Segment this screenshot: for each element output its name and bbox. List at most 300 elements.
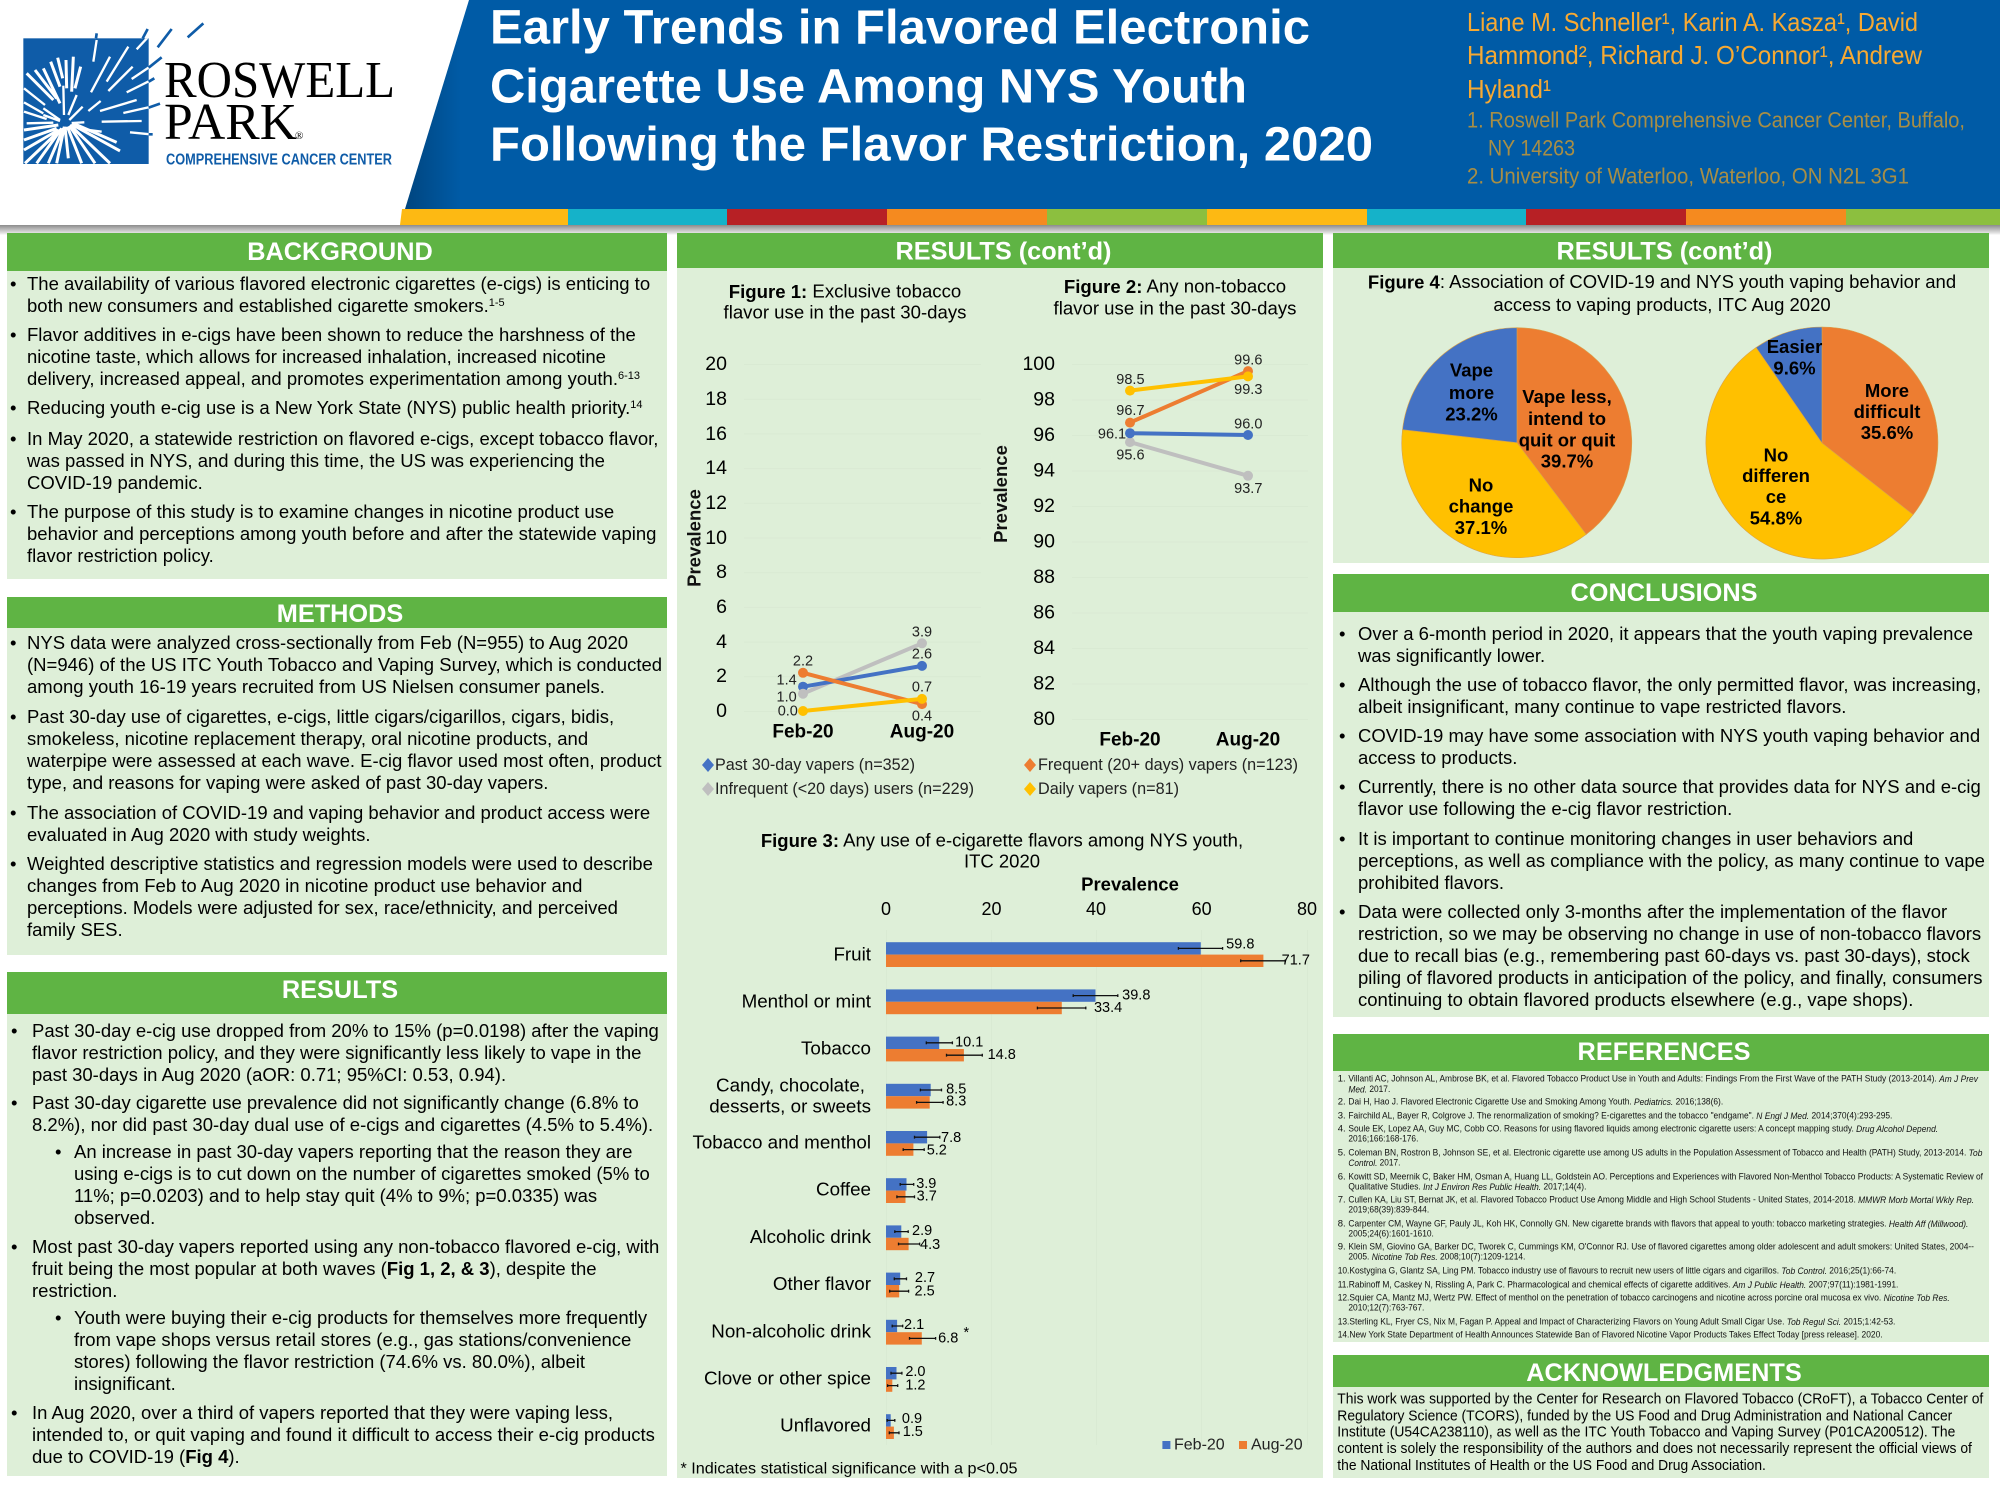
chart: figure 3 bar chart: 0 xyxy=(881,899,891,919)
bar row: Tobacco and menthol: Tobacco and menthol xyxy=(692,1132,871,1152)
bullet list: background: • xyxy=(10,428,16,449)
chart: figure 1 line chart: 0.7 xyxy=(912,680,932,696)
bar row: Clove or other spice: 2.0 xyxy=(905,1364,925,1380)
bullet list: results: restriction. xyxy=(32,1280,117,1301)
bullet list: conclusions: access to products. xyxy=(1358,747,1517,768)
bar row: Tobacco and menthol: 7.8 xyxy=(941,1130,961,1146)
chart: figure 3 bar chart: 80 xyxy=(1297,899,1317,919)
bullet list: background: The availability of various flavored electronic cigarettes (e-cigs) is enticing to xyxy=(27,273,650,294)
chart: figure 3 bar chart: 20 xyxy=(981,899,1002,919)
bar row: Tobacco: Tobacco xyxy=(801,1038,871,1058)
bullet list: background: COVID-19 pandemic. xyxy=(27,472,203,493)
bar row: Candy, chocolate, desserts, or sweets: Candy, chocolate, xyxy=(716,1074,865,1096)
bullet list: methods: Weighted descriptive statistics and regression models were used to describe xyxy=(27,852,653,874)
panel: results xyxy=(7,972,667,1476)
bullet list: conclusions: flavor use following the e-cig flavor restriction. xyxy=(1358,798,1732,819)
reference list: Cullen KA, Liu ST, Bernat JK, et al. Flavored Tobacco Product Use Among Middle and High School Students - United States, 2014-2018. MMWR Morb Mortal Wkly Rep. xyxy=(1348,1194,1974,1206)
bullet list: background: • xyxy=(10,500,16,522)
bar row: Clove or other spice: 1.2 xyxy=(905,1378,925,1394)
bar row: Fruit: 71.7 xyxy=(1282,952,1310,968)
heading: acknowledgments: ACKNOWLEDGMENTS xyxy=(1526,1359,1802,1387)
reference list: 11.Rabinoff M, Caskey N, Rissling A, Park C. Pharmacological and chemical effects of cigarette additives. Am J Public Health. 2007;97(11):1981-1991. xyxy=(1338,1280,1898,1290)
chart: figure 1 line chart: 2.6 xyxy=(912,646,932,662)
bullet list: background: nicotine taste, which allows for increased inhalation, increased nicotine xyxy=(27,346,606,367)
bullet list: results: using e-cigs is to cut down on the number of cigarettes smoked (5% to xyxy=(74,1163,650,1184)
bullet list: background: both new consumers and established cigarette smokers.1-5 xyxy=(27,295,505,316)
chart: figure 2 line chart: 96.7 xyxy=(1116,403,1145,419)
bullet list: methods: smokeless, nicotine replacement therapy, oral nicotine products, and xyxy=(27,728,588,749)
chart: figure 2 line chart: 88 xyxy=(1033,566,1055,588)
figure 3 title: ITC 2020 xyxy=(964,850,1040,872)
bar row: Unflavored: 0.9 xyxy=(902,1411,922,1427)
reference list: Control. 2017. xyxy=(1348,1158,1400,1168)
authors: Hammond², Richard J. O’Connor¹, Andrew xyxy=(1467,40,1922,70)
bar row: Coffee: 3.9 xyxy=(916,1176,936,1192)
bar row: Other flavor: 2.5 xyxy=(915,1283,935,1299)
panel: results continued, figures 1-3 xyxy=(677,233,1323,1478)
reference list: 2010;12(7):763-767. xyxy=(1348,1302,1424,1314)
chart: figure 2 line chart: Prevalence xyxy=(990,445,1011,543)
header banner xyxy=(0,0,2000,225)
bullet list: methods: • xyxy=(10,852,16,874)
bullet list: background: Reducing youth e-cig use is a New York State (NYS) public health priority.14 xyxy=(27,397,643,418)
chart: pie, access to products: More xyxy=(1865,380,1909,401)
reference list: 7. xyxy=(1338,1194,1346,1206)
chart: figure 2 line chart: 99.6 xyxy=(1234,352,1262,368)
chart: figure 1 line chart: 6 xyxy=(716,596,727,618)
title: Following the Flavor Restriction, 2020 xyxy=(490,118,1373,172)
bullet list: conclusions: It is important to continue monitoring changes in user behaviors and xyxy=(1358,828,1913,849)
bullet list: conclusions: perceptions, as well as compliance with the policy, as many continue to vape xyxy=(1358,850,1985,871)
bar row: Other flavor: Other flavor xyxy=(773,1273,871,1294)
chart: pie, change in vaping behavior: No xyxy=(1469,474,1493,496)
chart: pie, access to products: 35.6% xyxy=(1861,422,1913,443)
chart: figure 1 line chart: 0 xyxy=(716,700,727,722)
bar row: Candy, chocolate, desserts, or sweets: 8.3 xyxy=(946,1094,966,1110)
heading: results cont'd: RESULTS (cont’d) xyxy=(1557,238,1772,266)
bar row: Tobacco xyxy=(801,1035,1016,1063)
legend: line charts: Daily vapers (n=81) xyxy=(1038,780,1179,798)
legend: line charts: Past 30-day vapers (n=352) xyxy=(715,756,915,774)
chart: figure 1 line chart: Aug-20 xyxy=(890,722,954,742)
reference list: 2. xyxy=(1338,1096,1346,1108)
chart: pie, change in vaping behavior: quit or quit xyxy=(1519,430,1615,450)
bullet list: background: behavior and perceptions among youth before and after the statewide vaping xyxy=(27,522,656,544)
legend: line charts: Frequent (20+ days) vapers (n=123) xyxy=(1038,756,1298,774)
acknowledgments text: the National Institutes of Health or the US Food and Drug Association. xyxy=(1337,1458,1766,1474)
chart: figure 2 line chart xyxy=(990,352,1308,750)
bullet list: methods: • xyxy=(10,706,16,727)
reference list: Carpenter CM, Wayne GF, Pauly JL, Koh HK, Connolly GN. New cigarette brands with flavors that appeal to youth: tobacco marketing strategies. Health Aff (Millwood). xyxy=(1348,1218,1968,1230)
chart: figure 1 line chart: 18 xyxy=(705,388,727,410)
chart: pie, change in vaping behavior: 23.2% xyxy=(1445,404,1498,424)
chart: figure 2 line chart: 98 xyxy=(1033,388,1055,410)
reference list: 9. xyxy=(1338,1242,1346,1252)
reference list: Med. 2017. xyxy=(1348,1084,1390,1095)
bullet list: results: • xyxy=(11,1092,17,1113)
figure 4 title: access to vaping products, ITC Aug 2020 xyxy=(1493,294,1831,315)
legend: line charts xyxy=(702,756,1298,798)
bullet list: conclusions: • xyxy=(1339,725,1345,746)
chart: figure 1 line chart: 10 xyxy=(705,527,727,549)
title: Cigarette Use Among NYS Youth xyxy=(490,60,1247,114)
chart: pie, change in vaping behavior: Vape less, xyxy=(1522,386,1612,407)
bullet list: methods xyxy=(10,632,662,940)
reference list: Qualitative Studies. Int J Environ Res Public Health. 2017;14(4). xyxy=(1348,1182,1586,1192)
bar row: Unflavored xyxy=(780,1411,923,1440)
chart: figure 1 line chart: 0.4 xyxy=(912,708,932,724)
blue title band xyxy=(405,0,2000,209)
chart: pie, access to products: ce xyxy=(1766,486,1786,507)
bullet list: conclusions: • xyxy=(1339,828,1345,849)
bullet list: results: fruit being the most popular at both waves (Fig 1, 2, & 3), despite the xyxy=(32,1258,597,1279)
heading: results cont'd xyxy=(1333,233,1989,268)
bullet list: conclusions: Over a 6-month period in 2020, it appears that the youth vaping prevalence xyxy=(1358,623,1973,644)
chart: pie, access to products: differen xyxy=(1742,465,1810,486)
legend: line charts: Infrequent (<20 days) users (n=229) xyxy=(715,780,974,798)
figure 4 title xyxy=(1368,271,1956,315)
acknowledgments text xyxy=(1337,1391,1984,1474)
bar row: Alcoholic drink xyxy=(750,1223,940,1253)
bullet list: background: The purpose of this study is to examine changes in nicotine product use xyxy=(27,500,614,522)
bar row: Coffee: 3.7 xyxy=(917,1188,937,1204)
chart: pie, change in vaping behavior: Vape xyxy=(1450,360,1493,380)
authors xyxy=(1467,7,1922,104)
chart: pie, access to products: 54.8% xyxy=(1750,508,1802,528)
bar row: Tobacco and menthol xyxy=(692,1130,961,1158)
bar row: Tobacco: 14.8 xyxy=(988,1047,1016,1063)
bar row: Clove or other spice: Clove or other spice xyxy=(704,1368,871,1388)
bar row: Coffee xyxy=(816,1176,937,1204)
bar row: Candy, chocolate, desserts, or sweets: desserts, or sweets xyxy=(709,1096,871,1116)
bullet list: results: 8.2%), nor did past 30-day dual use of e-cigs and cigarettes (4.5% to 5.4%). xyxy=(32,1114,653,1135)
bar row: Non-alcoholic drink: 2.1 xyxy=(904,1317,924,1333)
panel: references xyxy=(1333,1034,1989,1342)
chart: figure 1 line chart: 4 xyxy=(716,631,727,653)
icon: Roswell Park starburst logo mark xyxy=(23,23,203,164)
chart: figure 1 line chart: 16 xyxy=(705,423,727,445)
chart: figure 1 line chart: 2 xyxy=(716,665,727,687)
affiliations: 2. University of Waterloo, Waterloo, ON N2L 3G1 xyxy=(1467,164,1909,188)
bar row: Clove or other spice xyxy=(704,1364,925,1394)
bullet list: conclusions: restriction, so we may be observing no change in use of non-tobacco flavors xyxy=(1358,923,1981,944)
bullet list: results: • xyxy=(55,1307,61,1328)
chart: figure 2 line chart: Feb-20 xyxy=(1099,730,1161,750)
chart: pie, change in vaping behavior: 37.1% xyxy=(1455,517,1507,538)
chart: figure 3 bar chart: 60 xyxy=(1192,899,1212,919)
chart: figure 2 line chart: Aug-20 xyxy=(1216,730,1280,750)
bullet list: background: was passed in NYS, and during this time, the US was experiencing the xyxy=(27,450,605,471)
bar row: Menthol or mint: Menthol or mint xyxy=(742,990,872,1012)
bullet list: conclusions: continuing to obtain flavored products elsewhere (e.g., vape shops). xyxy=(1358,989,1913,1010)
chart: figure 2 line chart: 96 xyxy=(1033,424,1055,446)
chart: pie, access to products: difficult xyxy=(1854,401,1920,422)
figure 3 title: Figure 3: Any use of e-cigarette flavors among NYS youth, xyxy=(761,830,1243,850)
title xyxy=(490,2,1373,172)
chart: figure 1 line chart xyxy=(684,353,981,742)
bullet list: results: Youth were buying their e-cig products for themselves more frequently xyxy=(74,1307,647,1328)
bullet list: results: • xyxy=(11,1020,17,1041)
reference list xyxy=(1338,1074,1983,1340)
bar row: Alcoholic drink: 2.9 xyxy=(912,1223,932,1239)
chart: pie, change in vaping behavior: 39.7% xyxy=(1541,450,1593,472)
panel: background xyxy=(7,233,667,579)
bullet list: methods: • xyxy=(10,802,16,822)
affiliations: NY 14263 xyxy=(1488,136,1575,160)
figure 2 title xyxy=(1054,276,1296,318)
title: Early Trends in Flavored Electronic xyxy=(490,2,1310,54)
chart: figure 1 line chart: Prevalence xyxy=(684,489,704,587)
heading: results: RESULTS xyxy=(282,976,398,1004)
reference list: 4. xyxy=(1338,1124,1346,1134)
panel: acknowledgments xyxy=(1333,1355,1989,1478)
bullet list: conclusions: Although the use of tobacco flavor, the only permitted flavor, was increasing, xyxy=(1358,674,1981,695)
chart: figure 3 bar chart xyxy=(692,874,1317,1445)
chart: figure 1 line chart: 2.2 xyxy=(793,653,813,669)
bullet list: results: stores) following the flavor restriction (74.6% vs. 80.0%), albeit xyxy=(74,1351,585,1372)
chart: figure 1 line chart: 12 xyxy=(705,492,727,514)
reference list: 10.Kostygina G, Glantz SA, Ling PM. Tobacco industry use of flavours to recruit new users of little cigars and cigarillos. Tob Control. 2016;25(1):66-74. xyxy=(1338,1266,1896,1276)
bullet list: background: • xyxy=(10,324,16,345)
chart: figure 1 line chart: 1.0 xyxy=(777,690,797,706)
figure 4 title: Figure 4: Association of COVID-19 and NYS youth vaping behavior and xyxy=(1368,271,1956,292)
chart: figure 2 line chart: 96.1 xyxy=(1098,426,1126,442)
bullet list: methods: • xyxy=(10,632,16,653)
chart: figure 1 line chart: 8 xyxy=(716,561,727,583)
bullet list: background: • xyxy=(10,397,16,418)
bullet list: conclusions xyxy=(1339,623,1985,1010)
bar row: Tobacco: 10.1 xyxy=(955,1035,983,1051)
chart: figure 2 line chart: 99.3 xyxy=(1234,382,1262,398)
bullet list: results: flavor restriction policy, and they were significantly less likely to vape in the xyxy=(32,1042,641,1063)
bar row: Menthol or mint xyxy=(742,988,1150,1016)
bullet list: conclusions: Data were collected only 3-months after the implementation of the flavor xyxy=(1358,901,1947,922)
bullet list: methods: (N=946) of the US ITC Youth Tobacco and Vaping Survey, which is conducted xyxy=(27,654,662,675)
chart: figure 1 line chart: 1.4 xyxy=(777,672,797,688)
reference list: 6. xyxy=(1338,1172,1346,1182)
logo wordmark xyxy=(164,52,395,168)
chart: figure 2 line chart: 98.5 xyxy=(1116,372,1145,388)
bullet list: methods: type, and reasons for vaping were asked of past 30-day vapers. xyxy=(27,772,548,793)
chart: figure 2 line chart: 95.6 xyxy=(1116,447,1145,463)
heading: references: REFERENCES xyxy=(1578,1038,1750,1066)
bullet list: results: • xyxy=(11,1402,17,1423)
affiliations: 1. Roswell Park Comprehensive Cancer Center, Buffalo, xyxy=(1467,108,1965,132)
chart: figure 1 line chart: 14 xyxy=(705,457,727,479)
figure 3 title xyxy=(761,830,1243,872)
footnote: * Indicates statistical significance with a p<0.05 xyxy=(680,1460,1018,1478)
legend: bar chart xyxy=(1162,1436,1303,1454)
bullet list: results: 11%; p=0.0203) and to help stay quit (4% to 9%; p=0.0335) was xyxy=(74,1185,597,1206)
bullet list: results: In Aug 2020, over a third of vapers reported that they were vaping less, xyxy=(32,1402,613,1423)
bar row: Candy, chocolate, desserts, or sweets xyxy=(709,1074,966,1116)
bullet list: methods: family SES. xyxy=(27,918,123,940)
chart: figure 2 line chart: 90 xyxy=(1033,530,1055,552)
figure 1 title: Figure 1: Exclusive tobacco xyxy=(729,280,961,302)
logo wordmark: ROSWELL xyxy=(164,52,395,109)
bullet list: results xyxy=(11,1020,659,1467)
bullet list: results: • xyxy=(55,1141,61,1162)
heading: acknowledgments xyxy=(1333,1355,1989,1387)
figure 1 title: flavor use in the past 30-days xyxy=(724,302,966,322)
bullet list: results: An increase in past 30-day vapers reporting that the reason they are xyxy=(74,1141,632,1162)
chart: figure 2 line chart: 92 xyxy=(1033,495,1055,517)
reference list: 2005;24(6):1601-1610. xyxy=(1348,1228,1434,1240)
bullet list: methods: The association of COVID-19 and vaping behavior and product access were xyxy=(27,802,650,822)
acknowledgments text: Institute (U54CA238110), as well as the ITC Youth Tobacco and Vaping Survey (P01CA200512). The xyxy=(1337,1425,1955,1441)
chart: figure 2 line chart: 100 xyxy=(1022,353,1055,375)
bar row: Non-alcoholic drink xyxy=(711,1317,969,1346)
bullet list: results: observed. xyxy=(74,1207,155,1228)
bullet list: conclusions: due to recall bias (e.g., remembering past 60-days vs. past 30-days), stock xyxy=(1358,945,1970,966)
bullet list: conclusions: Currently, there is no other data source that provides data for NYS and e-cig xyxy=(1358,776,1981,797)
chart: figure 3 bar chart: Prevalence xyxy=(1081,874,1179,894)
reference list: 2019;68(39):839-844. xyxy=(1348,1204,1429,1216)
chart: figure 2 line chart: 82 xyxy=(1033,672,1055,694)
heading: results xyxy=(7,972,667,1014)
reference list: 5. xyxy=(1338,1148,1346,1158)
bullet list: results: intended to, or quit vaping and found it difficult to access their e-cig products xyxy=(32,1424,655,1445)
bullet list: background: In May 2020, a statewide restriction on flavored e-cigs, except tobacco flavor, xyxy=(27,428,658,449)
bar row: Menthol or mint: 33.4 xyxy=(1094,1000,1122,1016)
bar row: Candy, chocolate, desserts, or sweets: 8.5 xyxy=(946,1082,966,1098)
bullet list: methods: NYS data were analyzed cross-sectionally from Feb (N=955) to Aug 2020 xyxy=(27,632,628,653)
bullet list: results: • xyxy=(11,1236,17,1257)
bullet list: methods: changes from Feb to Aug 2020 in nicotine product use behavior and xyxy=(27,874,582,896)
heading: results cont'd xyxy=(677,233,1323,268)
bar row: Fruit: Fruit xyxy=(833,944,872,964)
chart: figure 2 line chart: 93.7 xyxy=(1234,481,1262,497)
chart: pie, access to products xyxy=(1706,327,1938,559)
chart: figure 1 line chart: 0.0 xyxy=(778,703,798,719)
bar row: Other flavor xyxy=(773,1270,935,1299)
heading: methods: METHODS xyxy=(277,600,403,628)
bar row: Menthol or mint: 39.8 xyxy=(1122,988,1150,1004)
reference list: 2016;166:168-176. xyxy=(1348,1134,1418,1144)
logo wordmark: PARK xyxy=(164,94,297,151)
heading: background: BACKGROUND xyxy=(247,238,433,266)
chart: figure 1 line chart: 20 xyxy=(705,353,727,375)
chart: figure 1 line chart: Feb-20 xyxy=(772,722,834,742)
figure 2 title: flavor use in the past 30-days xyxy=(1054,298,1296,318)
bar row: Coffee: Coffee xyxy=(816,1178,871,1200)
heading: references xyxy=(1333,1034,1989,1071)
acknowledgments text: content is solely the responsibility of the authors and does not necessarily represent the official views of xyxy=(1337,1441,1973,1457)
bullet list: conclusions: albeit insignificant, many continue to vape restricted flavors. xyxy=(1358,696,1846,717)
logo wordmark: ® xyxy=(295,130,303,142)
chart: figure 1 line chart: 3.9 xyxy=(912,624,932,640)
bullet list: results: Past 30-day cigarette use prevalence did not significantly change (6.8% to xyxy=(32,1092,639,1113)
bullet list: conclusions: • xyxy=(1339,623,1345,644)
bullet list: conclusions: • xyxy=(1339,674,1345,695)
reference list: 14.New York State Department of Health Announces Statewide Ban of Flavored Nicotine Vapor Products Takes Effect Today [press release]. 2020. xyxy=(1338,1330,1883,1340)
bullet list: results: insignificant. xyxy=(74,1373,176,1394)
chart: pie, change in vaping behavior: more xyxy=(1449,382,1494,403)
bullet list: methods: Past 30-day use of cigarettes, e-cigs, little cigars/cigarillos, cigars, bidis, xyxy=(27,706,614,727)
bullet list: conclusions: • xyxy=(1339,901,1345,922)
chart: pie, access to products: No xyxy=(1764,444,1788,466)
bar row: Tobacco and menthol: 5.2 xyxy=(927,1142,947,1158)
heading: background xyxy=(7,233,667,271)
bullet list: methods: among youth 16-19 years recruited from US Nielsen consumer panels. xyxy=(27,676,605,697)
bar row: Other flavor: 2.7 xyxy=(915,1270,935,1286)
colour stripe xyxy=(400,209,2000,225)
chart: figure 3 bar chart: 40 xyxy=(1086,899,1106,919)
bar row: Non-alcoholic drink: * xyxy=(963,1325,969,1341)
bar row: Fruit: 59.8 xyxy=(1226,936,1254,952)
chart: figure 2 line chart: 96.0 xyxy=(1234,416,1262,432)
bullet list: conclusions: was significantly lower. xyxy=(1358,645,1545,666)
reference list: Fairchild AL, Bayer R, Colgrove J. The renormalization of smoking? E-cigarettes and the tobacco "endgame". N Engl J Med. 2014;370(4):293-295. xyxy=(1348,1110,1892,1122)
bullet list: conclusions: • xyxy=(1339,776,1345,797)
bullet list: results: due to COVID-19 (Fig 4). xyxy=(32,1446,240,1467)
heading: conclusions xyxy=(1333,574,1989,612)
panel: results continued, figure 4 xyxy=(1333,233,1989,563)
reference list: 3. xyxy=(1338,1110,1346,1122)
bullet list: conclusions: prohibited flavors. xyxy=(1358,872,1504,893)
authors: Hyland¹ xyxy=(1467,74,1551,104)
reference list: 12.Squier CA, Mantz MJ, Wertz PW. Effect of menthol on the penetration of tobacco carcinogens and nicotine across porcine oral mucosa ex vivo. Nicotine Tob Res. xyxy=(1338,1292,1950,1304)
chart: pie, access to products: 9.6% xyxy=(1773,358,1816,378)
reference list: 8. xyxy=(1338,1218,1346,1230)
authors: Liane M. Schneller¹, Karin A. Kasza¹, David xyxy=(1467,7,1918,37)
reference list: Dai H, Hao J. Flavored Electronic Cigarette Use and Smoking Among Youth. Pediatrics. 2016;138(6). xyxy=(1348,1096,1723,1108)
chart: pie, change in vaping behavior: change xyxy=(1449,496,1513,516)
reference list: 13.Sterling KL, Fryer CS, Nix M, Fagan P. Appeal and Impact of Characterizing Flavors on Young Adult Small Cigar Use. Tob Regul Sci. 2015;1:42-53. xyxy=(1338,1316,1895,1328)
bar row: Fruit xyxy=(833,936,1310,968)
legend: bar chart: Aug-20 xyxy=(1251,1436,1303,1454)
heading: conclusions: CONCLUSIONS xyxy=(1571,579,1757,607)
chart: pie, access to products: Easier xyxy=(1767,336,1822,357)
reference list: 2005. Nicotine Tob Res. 2008;10(7):1209-1214. xyxy=(1348,1252,1525,1262)
bullet list: results: Most past 30-day vapers reported using any non-tobacco flavored e-cig, with xyxy=(32,1236,659,1257)
bullet list: conclusions: COVID-19 may have some association with NYS youth vaping behavior and xyxy=(1358,725,1980,746)
chart: figure 2 line chart: 94 xyxy=(1033,460,1055,482)
bar row: Non-alcoholic drink: 6.8 xyxy=(938,1330,958,1346)
bullet list: methods: perceptions. Models were adjusted for sex, race/ethnicity, and perceived xyxy=(27,896,618,918)
chart: figure 2 line chart: 84 xyxy=(1033,637,1055,659)
chart: pie, change in vaping behavior: intend to xyxy=(1528,408,1606,429)
heading: results cont'd: RESULTS (cont’d) xyxy=(896,238,1111,266)
reference list: Soule EK, Lopez AA, Guy MC, Cobb CO. Reasons for using flavored liquids among electronic cigarette users: A concept mapping study. Drug Alcohol Depend. xyxy=(1348,1124,1938,1134)
logo wordmark: COMPREHENSIVE CANCER CENTER xyxy=(166,152,392,168)
reference list: 1. xyxy=(1338,1074,1346,1084)
bullet list: results: past 30-days in Aug 2020 (aOR: 0.71; 95%CI: 0.53, 0.94). xyxy=(32,1064,506,1085)
bullet list: background: • xyxy=(10,273,16,294)
figure 2 title: Figure 2: Any non-tobacco xyxy=(1064,276,1286,296)
chart: pie, change in vaping behavior xyxy=(1402,328,1632,558)
bullet list: background: flavor restriction policy. xyxy=(27,544,214,566)
figure 1 title xyxy=(724,280,966,322)
bullet list: results: Past 30-day e-cig use dropped from 20% to 15% (p=0.0198) after the vaping xyxy=(32,1020,659,1041)
panel: conclusions xyxy=(1333,574,1989,1017)
heading: methods xyxy=(7,597,667,628)
bullet list: results: from vape shops versus retail stores (e.g., gas stations/convenience xyxy=(74,1329,631,1350)
bar row: Non-alcoholic drink: Non-alcoholic drink xyxy=(711,1320,872,1342)
panel: methods xyxy=(7,597,667,955)
bullet list: background xyxy=(10,273,658,566)
bar row: Unflavored: 1.5 xyxy=(903,1424,923,1440)
chart: figure 2 line chart: 80 xyxy=(1033,708,1055,730)
chart: figure 2 line chart: 86 xyxy=(1033,602,1055,624)
acknowledgments text: Regulatory Science (TCORS), funded by the US Food and Drug Administration and National Cancer xyxy=(1337,1408,1952,1424)
bullet list: background: Flavor additives in e-cigs have been shown to reduce the harshness of the xyxy=(27,324,636,345)
bar row: Alcoholic drink: 4.3 xyxy=(920,1237,940,1253)
bar row: Alcoholic drink: Alcoholic drink xyxy=(750,1226,872,1247)
bullet list: methods: waterpipe were assessed at each wave. E-cig flavor used most often, product xyxy=(27,750,661,771)
bullet list: background: delivery, increased appeal, and promotes experimentation among youth.6-13 xyxy=(27,368,640,389)
bullet list: conclusions: piling of flavored products in anticipation of the policy, and finally, consumers xyxy=(1358,967,1983,988)
